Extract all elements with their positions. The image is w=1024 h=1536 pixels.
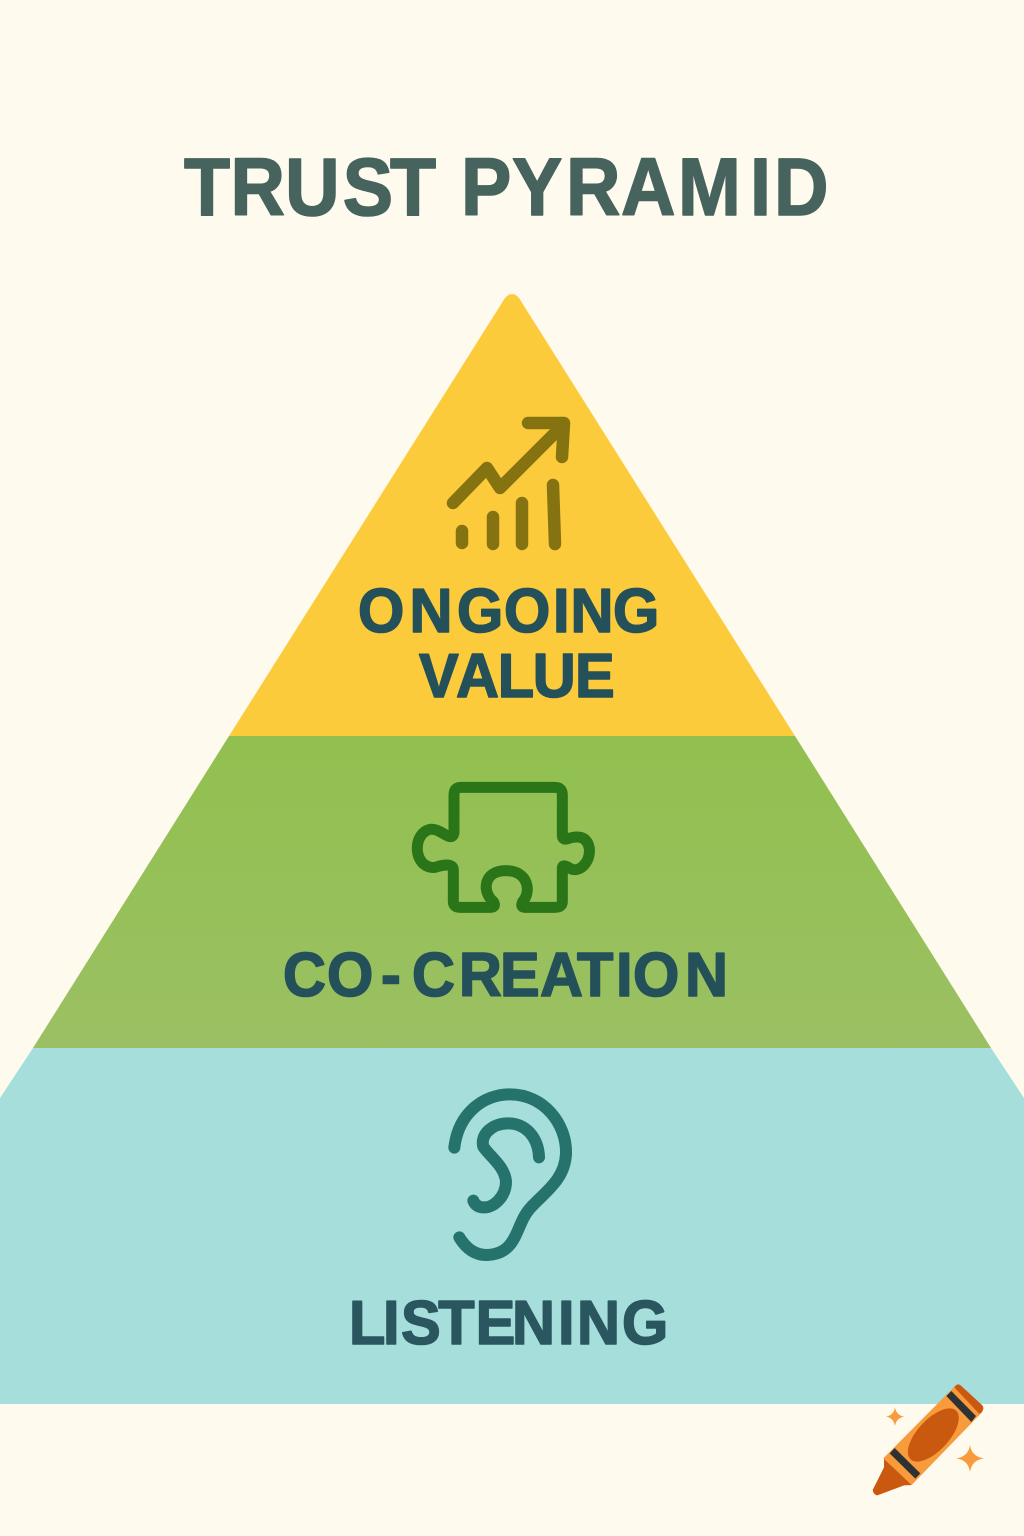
crayon bottom stripe — [890, 1448, 920, 1479]
icon: ear — [454, 1094, 566, 1255]
crayon body — [883, 1386, 983, 1485]
crayon cap — [954, 1384, 983, 1414]
icon: rising chart with arrow — [453, 423, 564, 544]
label: ongoing value: VALUE — [419, 641, 615, 710]
label: ongoing value — [358, 576, 659, 710]
label: co-creation: CO-CREATION — [283, 940, 728, 1009]
crayon oval label — [899, 1400, 968, 1470]
title: TRUST PYRAMID — [184, 141, 828, 233]
crayon top stripe — [946, 1391, 976, 1422]
crayon tip — [873, 1457, 912, 1495]
icon: puzzle piece — [417, 787, 589, 907]
icon: crayon with sparkles — [873, 1384, 984, 1495]
tier: listening — [0, 1048, 1024, 1404]
co-creation band — [33, 736, 991, 1048]
tier: ongoing value — [229, 294, 795, 736]
sparkle large — [956, 1445, 984, 1472]
tier: co-creation — [33, 736, 991, 1048]
ongoing value band — [229, 294, 795, 736]
label: ongoing value: ONGOING — [358, 576, 659, 645]
pyramid — [0, 294, 1024, 1404]
sparkle small — [886, 1407, 904, 1426]
listening band — [0, 1048, 1024, 1404]
label: listening: LISTENING — [349, 1288, 668, 1357]
